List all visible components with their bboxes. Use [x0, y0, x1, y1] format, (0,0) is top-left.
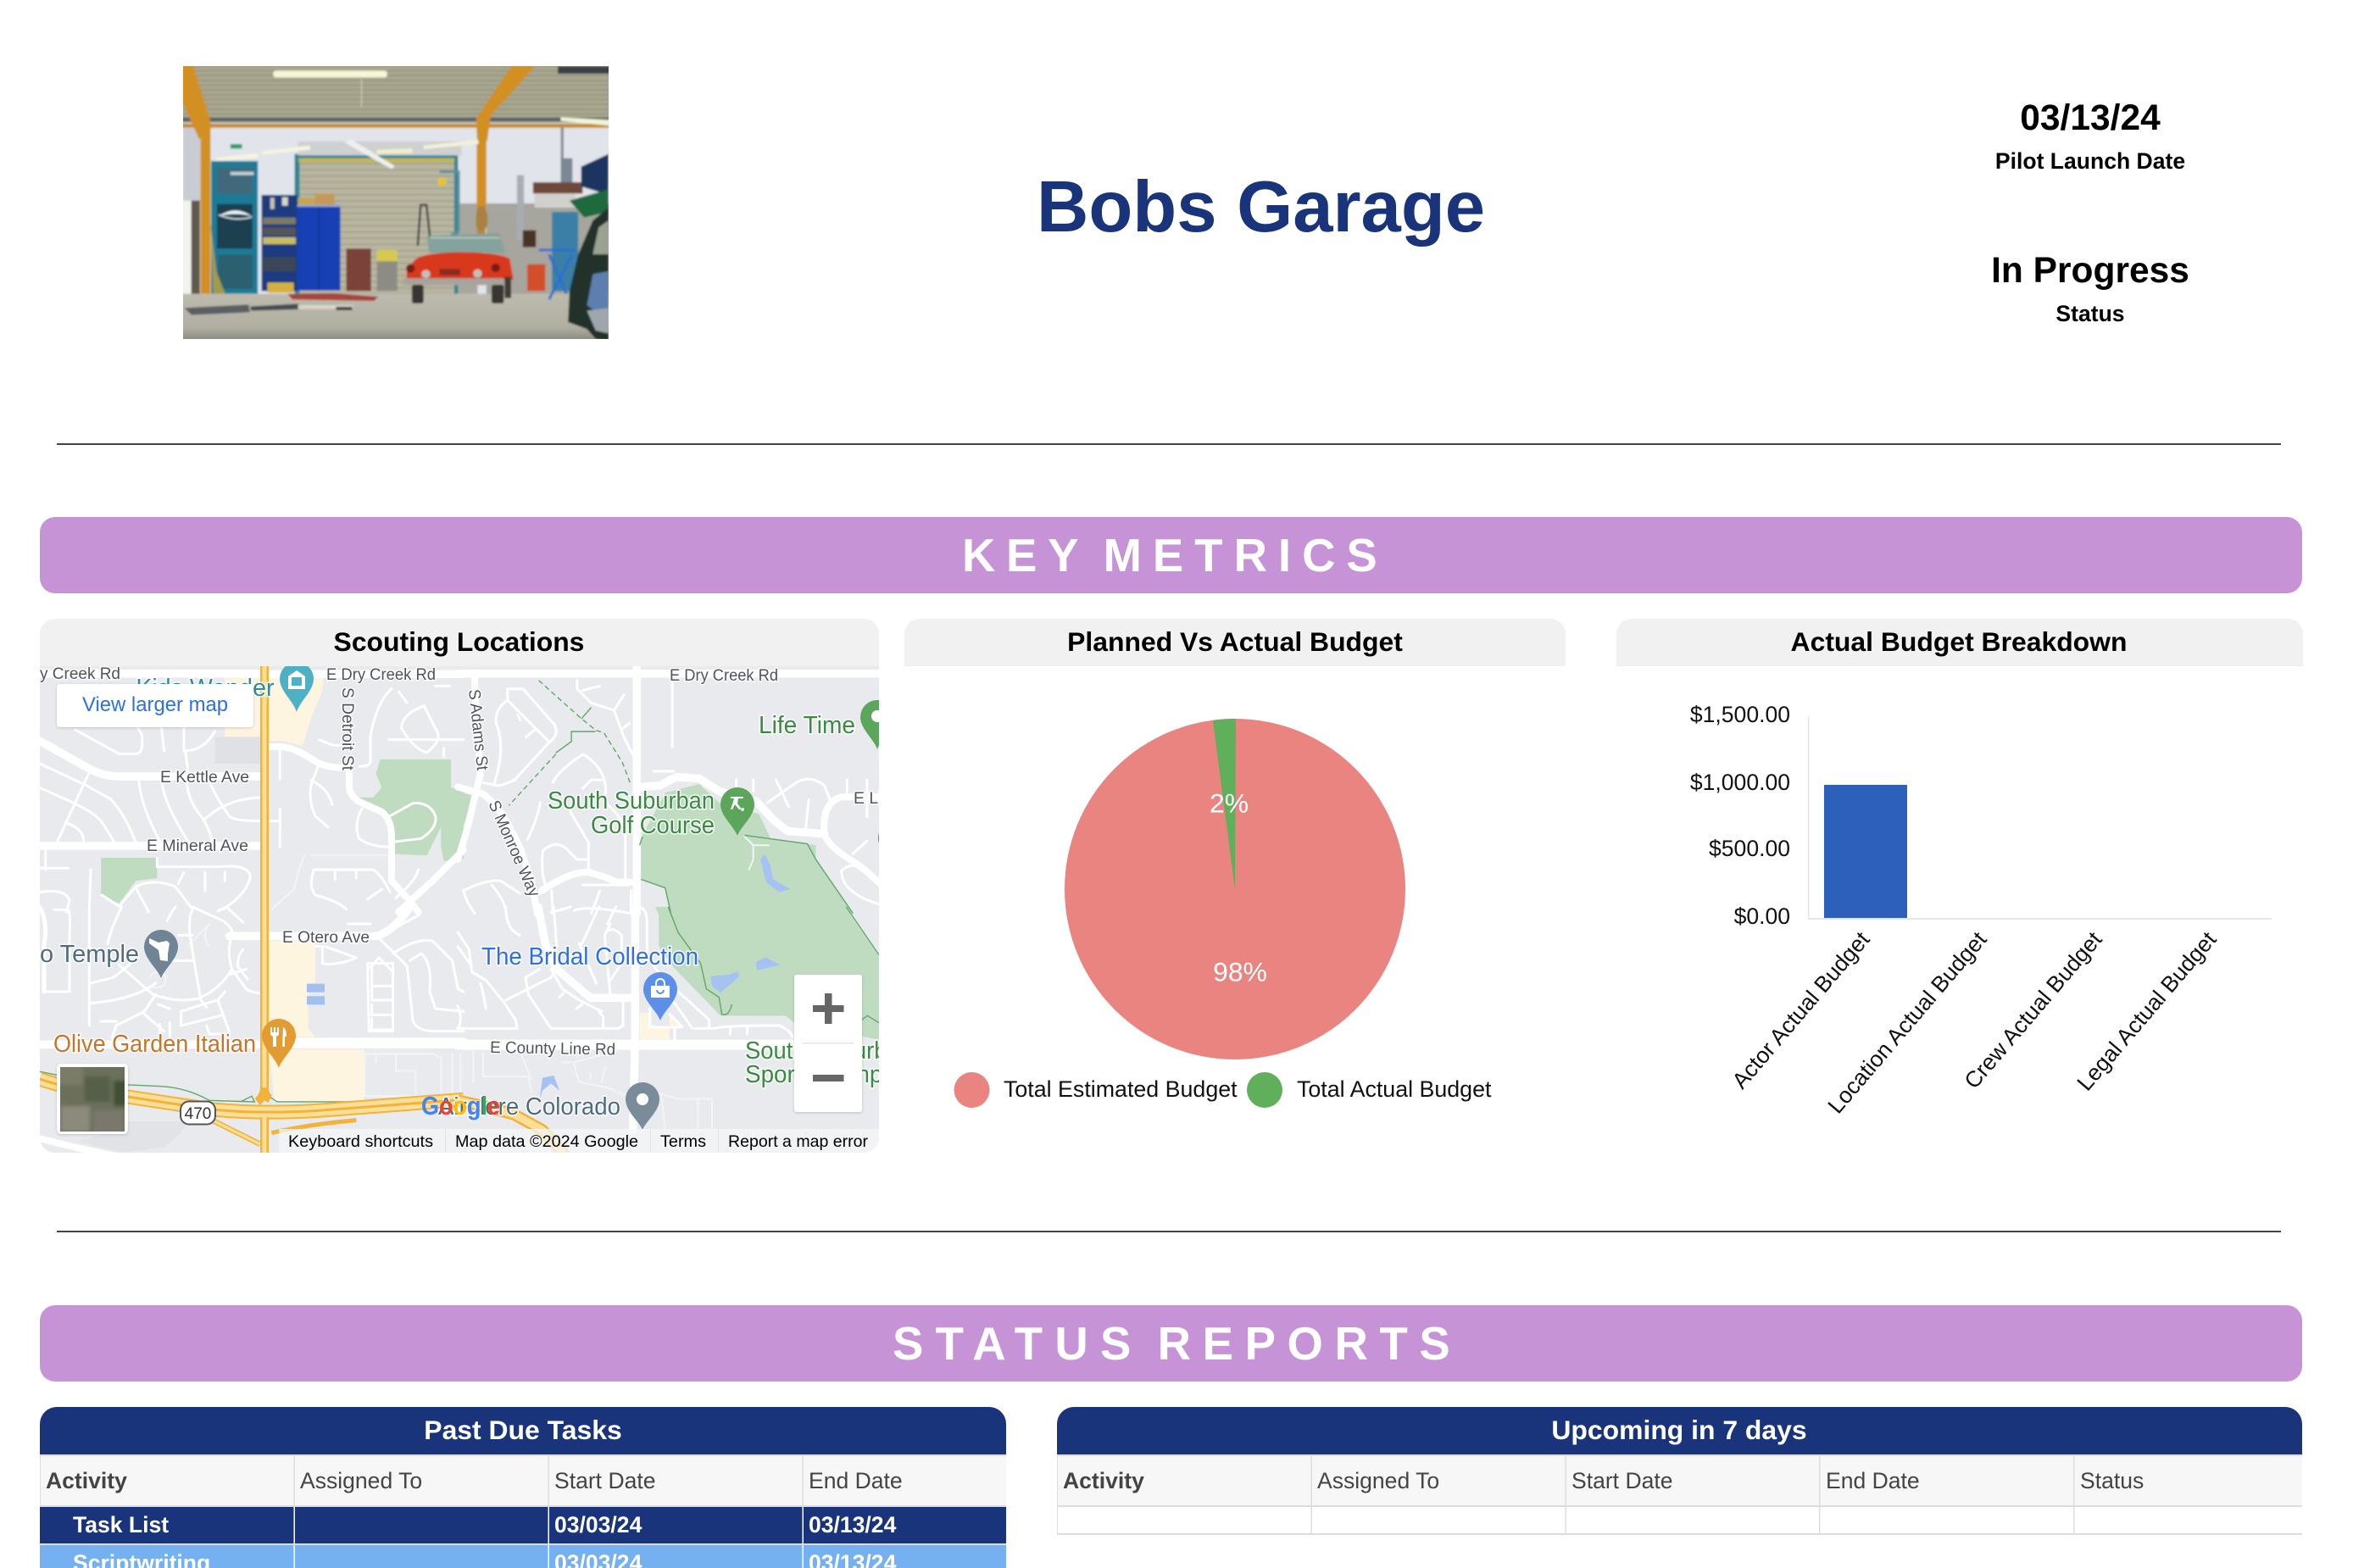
panel heading	[1616, 619, 2303, 666]
table: past due tasks	[40, 1407, 1006, 1568]
x axis labels	[1727, 926, 2222, 1118]
row: task list: Task List	[73, 1512, 169, 1537]
park and trail outlines	[40, 681, 879, 1102]
map road labels: E Otero Ave	[282, 928, 370, 947]
table title bar	[40, 1407, 1006, 1454]
map road labels: S Monroe Way	[484, 798, 543, 900]
column header row: Assigned To	[1317, 1468, 1439, 1493]
panel heading	[40, 619, 879, 666]
map road labels: S Adams St	[464, 688, 492, 772]
table: upcoming in 7 days	[1057, 1407, 2302, 1535]
column header row: Activity	[46, 1468, 127, 1493]
row: task list: 03/03/24	[554, 1512, 642, 1537]
column header row: Activity	[1063, 1468, 1144, 1493]
row: task list	[40, 1507, 1006, 1543]
banner: status reports: STATUS REPORTS	[893, 1318, 1461, 1370]
project status	[1991, 251, 2189, 326]
map roads	[40, 666, 882, 1161]
table title bar: Past Due Tasks	[424, 1415, 622, 1445]
date value: 03/13/24	[2020, 98, 2161, 138]
table title bar	[1057, 1407, 2302, 1454]
map place labels: o Temple	[40, 941, 139, 968]
panel heading	[904, 619, 1566, 666]
x axis labels: Legal Actual Budget	[2072, 926, 2222, 1095]
x axis labels: Actor Actual Budget	[1727, 926, 1875, 1093]
title: Bobs Garage	[1037, 167, 1485, 247]
map place labels: Airglere Colorado	[438, 1093, 620, 1120]
map place labels: South Suburban	[548, 787, 715, 815]
pie chart: 2%	[1210, 788, 1249, 819]
y axis labels: $500.00	[1709, 836, 1790, 861]
pie chart: 98%	[1213, 956, 1267, 987]
map place labels: Kids Wonder	[136, 675, 275, 702]
map attribution bar: Map data ©2024 Google	[455, 1132, 638, 1151]
highways: S Santa Fe and C-470	[40, 664, 565, 1155]
panel heading: Scouting Locations	[334, 626, 584, 657]
map road labels: E Mineral Ave	[147, 837, 248, 855]
pilot launch date	[1995, 98, 2185, 174]
map attribution bar	[279, 1129, 879, 1153]
map base areas	[40, 666, 879, 1153]
view larger map button: View larger map	[82, 693, 228, 716]
column header row: Assigned To	[300, 1468, 422, 1493]
map road labels: y Creek Rd	[40, 664, 120, 683]
map place labels: The Bridal Collection	[481, 943, 698, 970]
satellite thumbnail	[51, 1059, 131, 1140]
map road labels: E Kettle Ave	[160, 768, 249, 787]
y axis labels: $1,000.00	[1690, 770, 1790, 795]
map place labels	[40, 675, 913, 1120]
panel heading: Actual Budget Breakdown	[1791, 626, 2127, 657]
zoom controls	[794, 975, 862, 1112]
date label: Pilot Launch Date	[1995, 148, 2185, 174]
panel: scouting locations map	[40, 619, 879, 1153]
map road labels	[40, 664, 882, 1059]
map road labels: E Dry Creek Rd	[670, 666, 778, 685]
map place labels: Golf Course	[591, 812, 715, 839]
panel: actual budget breakdown	[1616, 619, 2303, 1118]
y axis labels: $1,500.00	[1690, 702, 1790, 727]
x axis labels: Location Actual Budget	[1822, 926, 1992, 1118]
status value: In Progress	[1991, 251, 2189, 291]
highway shield 470	[181, 1102, 215, 1124]
row: task list: 03/13/24	[809, 1512, 897, 1537]
pie legend: Total Estimated Budget	[1004, 1076, 1238, 1102]
column header row: Start Date	[1571, 1468, 1673, 1493]
y axis labels	[1690, 702, 1790, 929]
map road labels: S Detroit St	[338, 687, 357, 771]
table title bar: Upcoming in 7 days	[1551, 1415, 1807, 1445]
y axis labels: $0.00	[1734, 904, 1790, 929]
pie legend	[954, 1072, 1492, 1108]
bar chart	[1690, 702, 2272, 1118]
column header row	[40, 1454, 1006, 1507]
google logo: Google	[421, 1091, 500, 1120]
map pins	[144, 662, 912, 1130]
header photo: garage interior	[183, 66, 609, 339]
status label: Status	[2055, 301, 2125, 326]
column header row: End Date	[809, 1468, 903, 1493]
column header row: Start Date	[554, 1468, 656, 1493]
map attribution bar: Terms	[660, 1132, 706, 1151]
column header row: Status	[2080, 1468, 2144, 1493]
map attribution bar: Keyboard shortcuts	[288, 1132, 433, 1151]
x axis labels: Crew Actual Budget	[1959, 926, 2107, 1093]
panel heading: Planned Vs Actual Budget	[1067, 626, 1403, 657]
pie chart	[1065, 719, 1405, 1059]
column header row: End Date	[1826, 1468, 1920, 1493]
map road labels: E Dry Creek Rd	[326, 665, 436, 684]
map place labels: Olive Garden Italian	[53, 1031, 256, 1058]
map road labels: E County Line Rd	[490, 1038, 615, 1059]
pie legend: Total Actual Budget	[1297, 1076, 1492, 1102]
map attribution bar: Report a map error	[728, 1132, 868, 1151]
highway shield 470: 470	[185, 1105, 211, 1123]
column header row	[1057, 1454, 2302, 1507]
banner: status reports	[40, 1305, 2302, 1382]
map place labels: Life Time	[759, 712, 855, 739]
row: scriptwriting	[40, 1543, 1006, 1568]
view larger map button	[57, 684, 253, 727]
banner: key metrics: KEY METRICS	[962, 530, 1388, 581]
empty table row	[1057, 1456, 2302, 1535]
banner: key metrics	[40, 517, 2302, 593]
panel: planned vs actual budget	[904, 619, 1566, 1108]
